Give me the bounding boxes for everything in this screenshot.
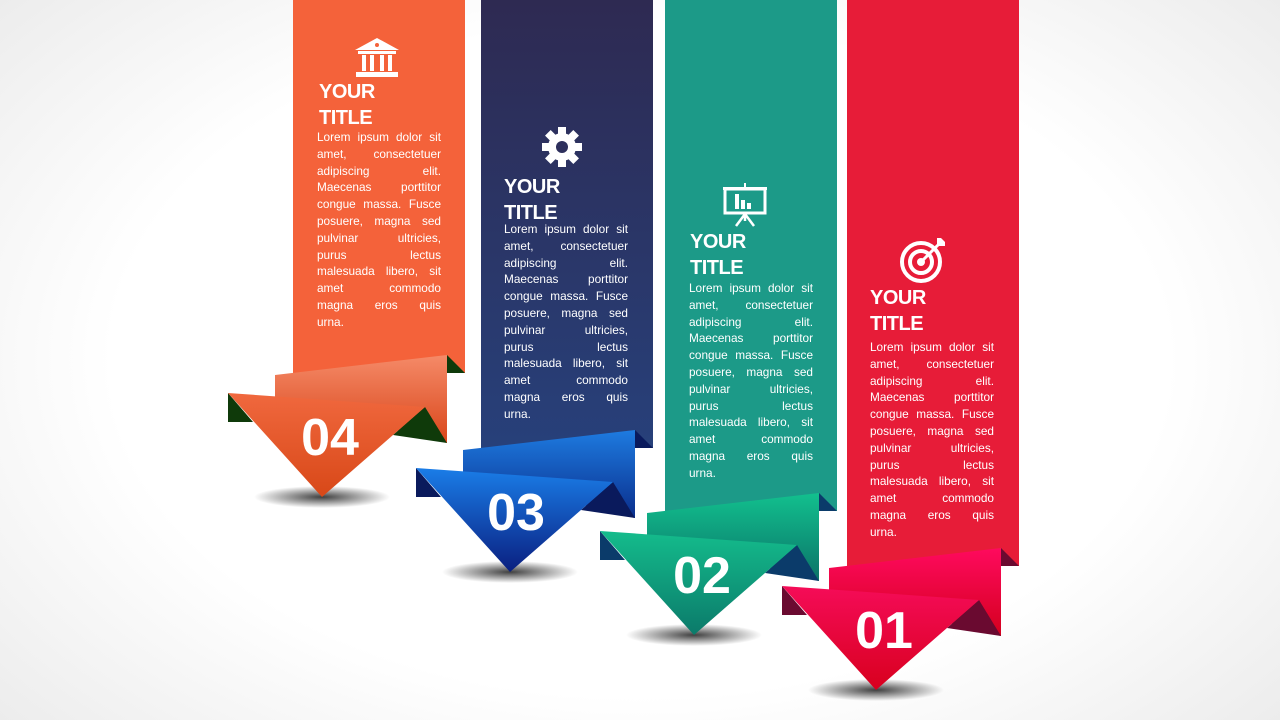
text 02: urna. [689, 466, 716, 480]
text 03: pulvinar ultricies, [504, 323, 628, 337]
group 03 [416, 0, 653, 582]
fold 04 with number [228, 355, 465, 508]
text 02: Lorem ipsum dolor sit [689, 281, 813, 295]
text 04 [317, 130, 441, 329]
title 03: YOUR [504, 176, 560, 198]
text 02: adipiscing elit. [689, 315, 813, 329]
column 04 [293, 0, 465, 373]
text 04: magna eros quis [317, 298, 441, 312]
text 04: pulvinar ultricies, [317, 231, 441, 245]
text 01: pulvinar ultricies, [870, 441, 994, 455]
text 04: Lorem ipsum dolor sit [317, 130, 441, 144]
column 02 [665, 0, 837, 511]
text 02: magna eros quis [689, 449, 813, 463]
text 03: adipiscing elit. [504, 256, 628, 270]
text 01: purus lectus [870, 458, 994, 472]
fold 04 with number: 04 [301, 409, 359, 467]
text 04: adipiscing elit. [317, 164, 441, 178]
text 02: Maecenas porttitor [689, 331, 813, 345]
title 04: YOUR [319, 81, 375, 103]
text 03: magna eros quis [504, 390, 628, 404]
column 01 [847, 0, 1019, 566]
title 01 [870, 287, 926, 335]
fold 03 with number [416, 430, 653, 582]
title 04 [319, 81, 375, 129]
icon: bank [355, 38, 399, 77]
title 02 [690, 231, 746, 279]
title 03 [504, 176, 560, 224]
fold 02 with number [600, 493, 837, 646]
text 03 [504, 222, 628, 421]
text 04: urna. [317, 315, 344, 329]
text 04: congue massa. Fusce [317, 197, 441, 211]
text 02: pulvinar ultricies, [689, 382, 813, 396]
text 02 [689, 281, 813, 480]
text 02: posuere, magna sed [689, 365, 813, 379]
text 03: congue massa. Fusce [504, 289, 628, 303]
column 03 [481, 0, 653, 448]
text 02: malesuada libero, sit [689, 415, 813, 429]
text 04: amet, consectetuer [317, 147, 441, 161]
text 01: adipiscing elit. [870, 374, 994, 388]
text 03: purus lectus [504, 340, 628, 354]
text 03: amet commodo [504, 373, 628, 387]
text 01: Maecenas porttitor [870, 390, 994, 404]
text 01: posuere, magna sed [870, 424, 994, 438]
text 02: purus lectus [689, 399, 813, 413]
text 03: malesuada libero, sit [504, 356, 628, 370]
title 04: TITLE [319, 107, 372, 129]
text 04: posuere, magna sed [317, 214, 441, 228]
title 02: TITLE [690, 257, 743, 279]
title 01: TITLE [870, 313, 923, 335]
text 04: amet commodo [317, 281, 441, 295]
text 03: Maecenas porttitor [504, 272, 628, 286]
text 03: Lorem ipsum dolor sit [504, 222, 628, 236]
fold 01 with number: 01 [855, 602, 913, 660]
fold 03 with number: 03 [487, 484, 545, 542]
text 01: amet commodo [870, 491, 994, 505]
text 01 [870, 340, 994, 539]
text 01: amet, consectetuer [870, 357, 994, 371]
text 03: posuere, magna sed [504, 306, 628, 320]
fold 01 with number [782, 548, 1019, 700]
text 04: malesuada libero, sit [317, 264, 441, 278]
group 04 [228, 0, 465, 508]
icon: gear [542, 127, 582, 167]
text 03: amet, consectetuer [504, 239, 628, 253]
icon: presentation board [723, 183, 767, 227]
title 01: YOUR [870, 287, 926, 309]
text 02: amet commodo [689, 432, 813, 446]
text 01: urna. [870, 525, 897, 539]
title 03: TITLE [504, 202, 557, 224]
text 01: congue massa. Fusce [870, 407, 994, 421]
group 01 [782, 0, 1019, 700]
icon: target [900, 238, 945, 283]
fold 02 with number: 02 [673, 547, 731, 605]
text 04: purus lectus [317, 248, 441, 262]
text 01: Lorem ipsum dolor sit [870, 340, 994, 354]
text 02: amet, consectetuer [689, 298, 813, 312]
text 04: Maecenas porttitor [317, 180, 441, 194]
group 02 [600, 0, 837, 646]
text 01: malesuada libero, sit [870, 474, 994, 488]
text 03: urna. [504, 407, 531, 421]
text 02: congue massa. Fusce [689, 348, 813, 362]
title 02: YOUR [690, 231, 746, 253]
text 01: magna eros quis [870, 508, 994, 522]
